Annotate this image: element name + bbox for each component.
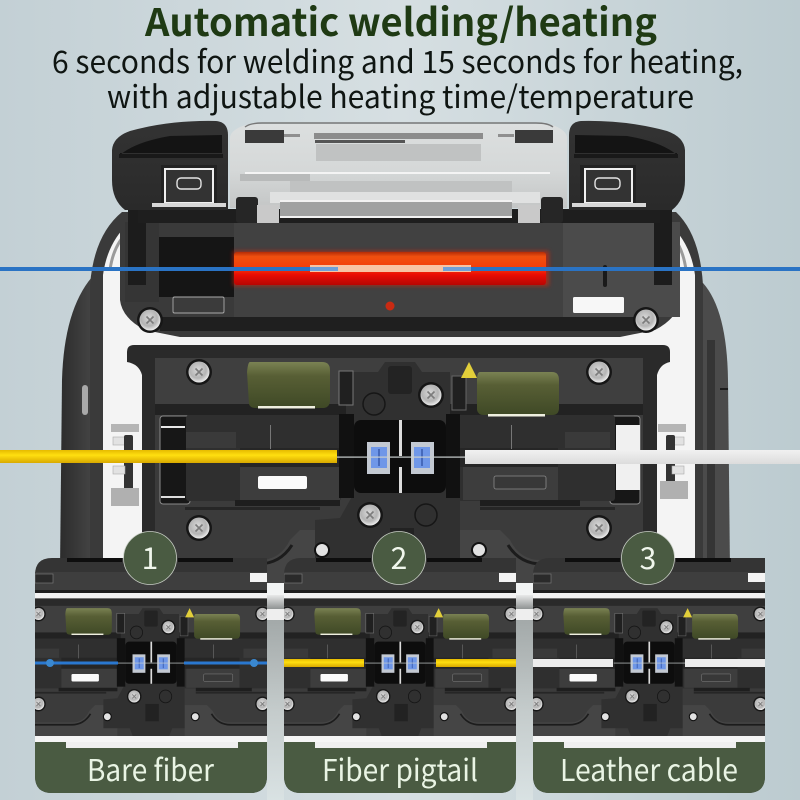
heating element	[233, 251, 549, 286]
left black cap	[112, 121, 228, 210]
label plate left	[173, 297, 224, 313]
badge 1	[124, 532, 176, 584]
badge 2	[372, 532, 426, 584]
latch window right	[585, 169, 632, 203]
splicing stage	[127, 345, 670, 590]
latch window left	[165, 169, 213, 203]
right black cap	[569, 121, 685, 210]
fusion splicer body	[60, 121, 730, 590]
right outer shell	[696, 283, 730, 570]
label: Bare fiber	[87, 746, 214, 790]
badge 3: 3	[640, 534, 656, 578]
panel 1: bare fiber	[0, 558, 302, 793]
heater tray	[120, 205, 680, 337]
label: Fiber pigtail	[322, 746, 478, 790]
screw left	[137, 307, 163, 333]
casing	[90, 212, 703, 570]
tray base	[120, 225, 680, 337]
badge 1: 1	[142, 534, 158, 578]
panel 3: leather cable	[496, 558, 800, 793]
white leather cable	[465, 450, 800, 464]
transparent lid	[230, 123, 567, 223]
badge 2: 2	[391, 534, 407, 578]
panel 2: fiber pigtail	[247, 558, 551, 793]
side latch right	[658, 424, 688, 499]
indicator LED	[386, 302, 394, 310]
subtitle	[52, 37, 743, 117]
side latch left	[111, 424, 139, 506]
left outer shell	[60, 277, 100, 570]
subtitle: 6 seconds for welding and 15 seconds for heating,	[52, 37, 743, 82]
yellow pigtail	[0, 450, 337, 463]
subtitle: with adjustable heating time/temperature	[107, 72, 694, 117]
blue fibre	[35, 659, 267, 667]
yellow fibre	[284, 659, 516, 667]
label: Leather cable	[560, 746, 738, 790]
label plate right	[573, 297, 624, 313]
panel gaps	[267, 583, 533, 800]
badge 3	[622, 532, 674, 584]
blue bare fibre through heater	[0, 265, 800, 272]
white cable	[533, 659, 765, 667]
screw right	[633, 307, 659, 333]
